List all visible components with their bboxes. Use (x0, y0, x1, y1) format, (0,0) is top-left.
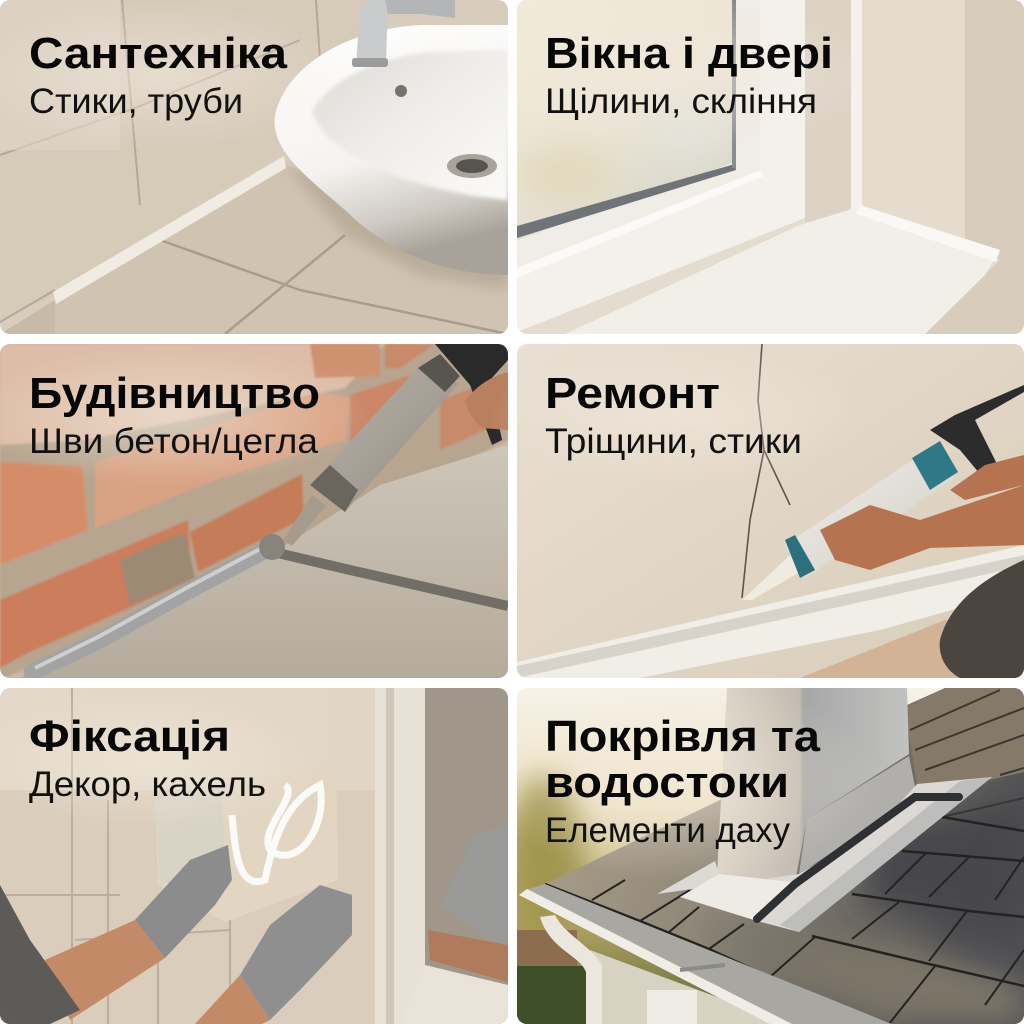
right wall (862, 0, 864, 206)
panel: repair (517, 344, 1024, 678)
text washes (0, 0, 880, 880)
panel: plumbing (0, 0, 508, 334)
panel: fixing (0, 688, 508, 1024)
panel: roof and gutters (505, 688, 1024, 1024)
heading: Вікна і двері: Вікна і двері (545, 29, 833, 78)
metal flashing (657, 756, 992, 932)
decorative tile (155, 780, 338, 922)
house wall (590, 950, 790, 1024)
heading: Фіксація: Фіксація (29, 712, 230, 761)
icon: arms (0, 885, 270, 1024)
fence (517, 930, 577, 968)
sink shadow (285, 165, 508, 290)
window frame (517, 0, 864, 332)
roof shingles (545, 688, 1024, 1024)
text: Щілини, скління: Щілини, скління (545, 82, 817, 121)
icon: faucet (352, 0, 455, 67)
baseboard (517, 545, 1024, 678)
icon: caulk gun (742, 385, 1024, 600)
text: Стики, труби: Стики, труби (29, 82, 243, 121)
window on house (647, 990, 697, 1024)
mirror frame (375, 688, 508, 1024)
window sill (565, 208, 1000, 334)
heading: Ремонт: Ремонт (545, 369, 720, 418)
icon: washbasin (275, 25, 508, 275)
icon: caulk gun (283, 344, 508, 546)
sealant strip (53, 156, 286, 304)
panel: windows and doors (515, 0, 1024, 334)
icon: hands and arms (820, 455, 1024, 570)
panel: construction (0, 344, 508, 680)
heading: Покрівля та водостоки: водостоки (545, 758, 789, 807)
floor tiles (0, 165, 508, 334)
icon: gloved left hand (135, 845, 232, 958)
heading: Покрівля та водостоки: Покрівля та (545, 712, 821, 761)
icon: knee (940, 560, 1024, 678)
wall tiles (0, 0, 321, 323)
window glass (517, 0, 732, 202)
ground (517, 966, 586, 1024)
text: Елементи даху: Елементи даху (545, 811, 790, 850)
sealant bead (32, 534, 508, 672)
text: Декор, кахель: Декор, кахель (29, 765, 266, 804)
brick wall (0, 344, 508, 680)
text: Тріщини, стики: Тріщини, стики (545, 422, 802, 461)
downpipe (540, 915, 602, 1024)
floor (800, 620, 1024, 678)
wall tiles (0, 688, 375, 1024)
chimney (717, 688, 909, 882)
heading: Сантехніка: Сантехніка (29, 29, 288, 78)
concrete floor (20, 445, 508, 678)
wall crack (742, 344, 790, 598)
text: Шви бетон/цегла: Шви бетон/цегла (29, 422, 319, 461)
heading: Будівництво: Будівництво (29, 369, 320, 418)
trees (505, 775, 585, 945)
mirror reflection (428, 825, 508, 982)
gutter (519, 884, 892, 1024)
icon: gloved right hand (240, 885, 352, 1020)
